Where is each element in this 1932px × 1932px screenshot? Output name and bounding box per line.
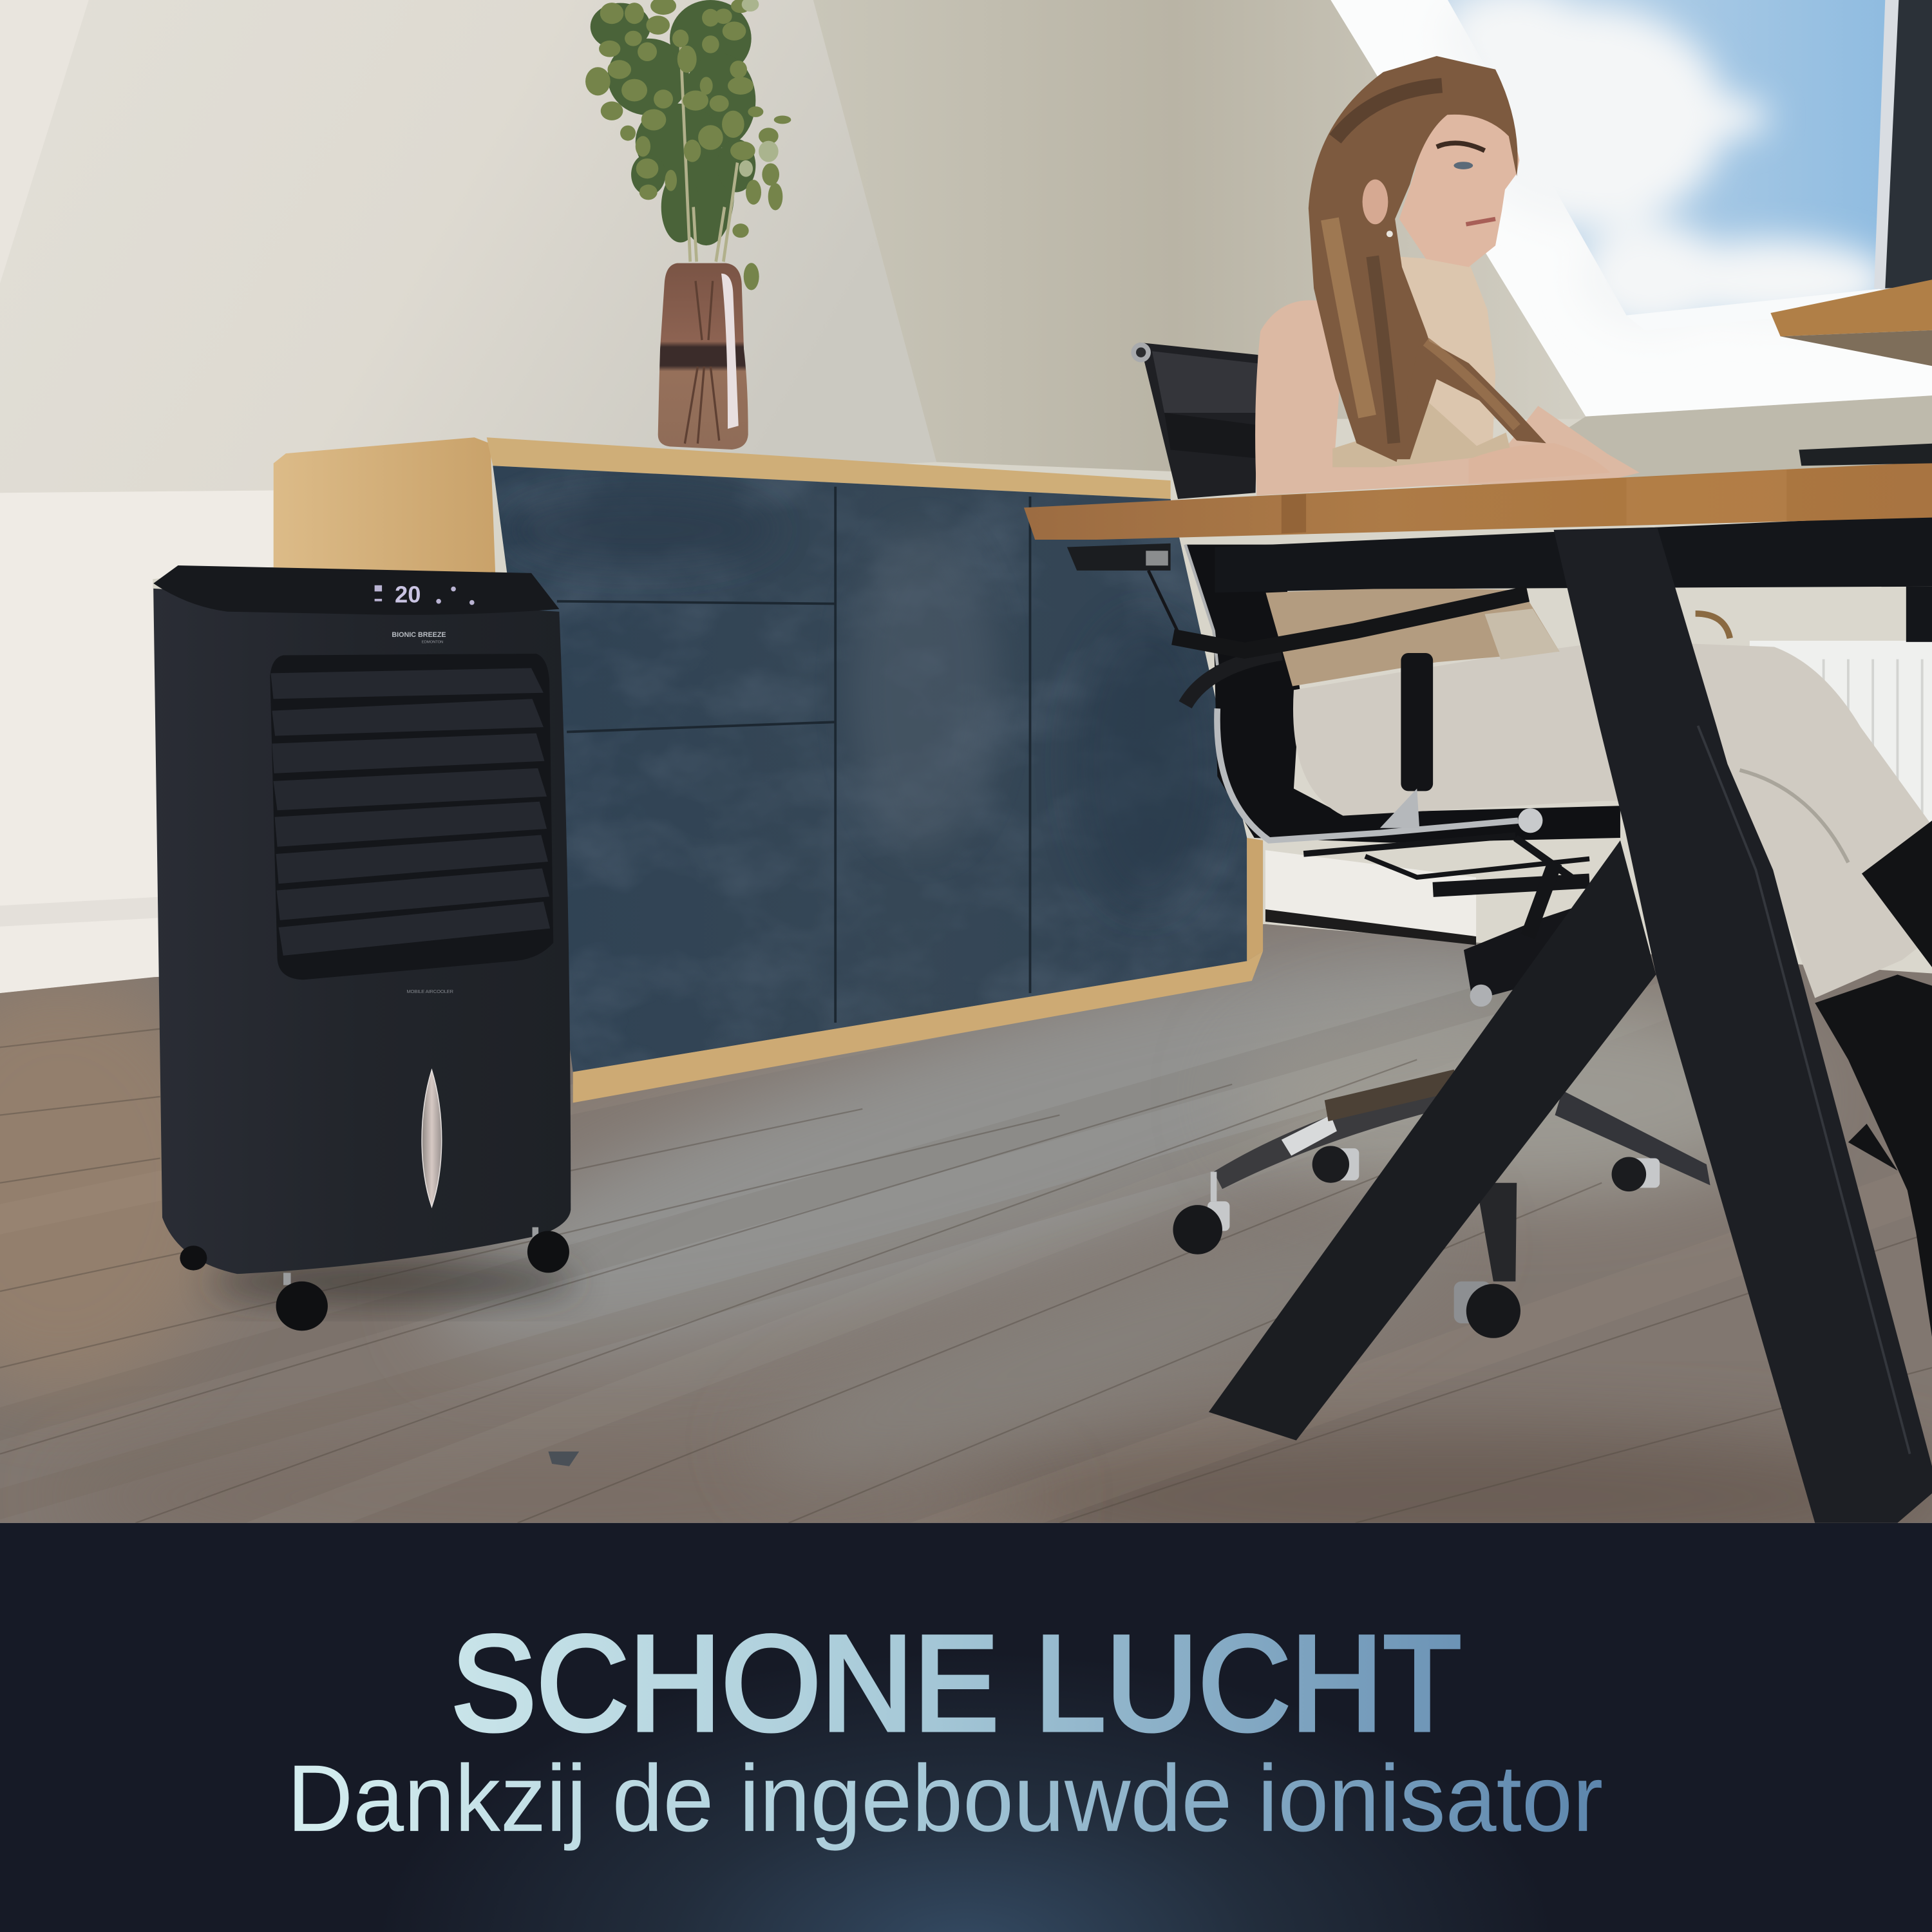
rear wall and radiator under desk (1244, 579, 1932, 973)
desk legs (1209, 527, 1932, 1523)
plant in vase (585, 0, 791, 450)
water level window (422, 1070, 442, 1207)
arm and shoulder (1255, 300, 1640, 495)
product label: MOBILE AIRCOOLER (406, 989, 454, 994)
knitted top (1332, 395, 1511, 468)
woman seated at desk (1255, 56, 1932, 1337)
glass vase (658, 263, 748, 450)
trousers and lower leg (1293, 641, 1932, 998)
face (1399, 107, 1519, 267)
leaves (585, 0, 791, 290)
skylight window (1331, 0, 1932, 417)
stems (681, 44, 737, 261)
brand logo: BIONIC BREEZE (392, 631, 446, 639)
monitor (1874, 0, 1932, 296)
louvre recess (270, 654, 553, 980)
desk top, right end (1770, 279, 1932, 366)
sideboard cabinet (274, 437, 1282, 1103)
sweater below desk (1265, 587, 1560, 687)
hair (1309, 56, 1518, 462)
base arms (1214, 1082, 1452, 1189)
air cooler (153, 565, 571, 1331)
display icons (375, 585, 475, 605)
louvre slats (270, 668, 550, 956)
background: room walls (0, 0, 1932, 1528)
castors (1173, 1146, 1660, 1338)
seat mechanism (1303, 835, 1589, 936)
subheadline: Dankzij de ingebouwde ionisator (287, 1746, 1603, 1852)
chest (1394, 256, 1495, 454)
top lid (153, 565, 559, 615)
castor wheels (180, 1227, 569, 1331)
boots (1815, 820, 1932, 1337)
floor (0, 924, 1932, 1523)
brand sub-label: EDMONTON (422, 641, 443, 645)
hand (1469, 443, 1610, 483)
foliage mass (591, 0, 755, 245)
headline: SCHONE LUCHT (451, 1607, 1461, 1759)
desk top and frame (1024, 444, 1932, 828)
display readout: 20 (395, 582, 421, 608)
office chair seat and back (1131, 343, 1620, 936)
hair right strand (1394, 336, 1546, 459)
cooler body (153, 589, 571, 1274)
office chair base (1173, 905, 1710, 1338)
pale leaves (739, 0, 779, 177)
bottom banner (0, 1523, 1932, 1932)
ear and facial features (1363, 143, 1495, 237)
